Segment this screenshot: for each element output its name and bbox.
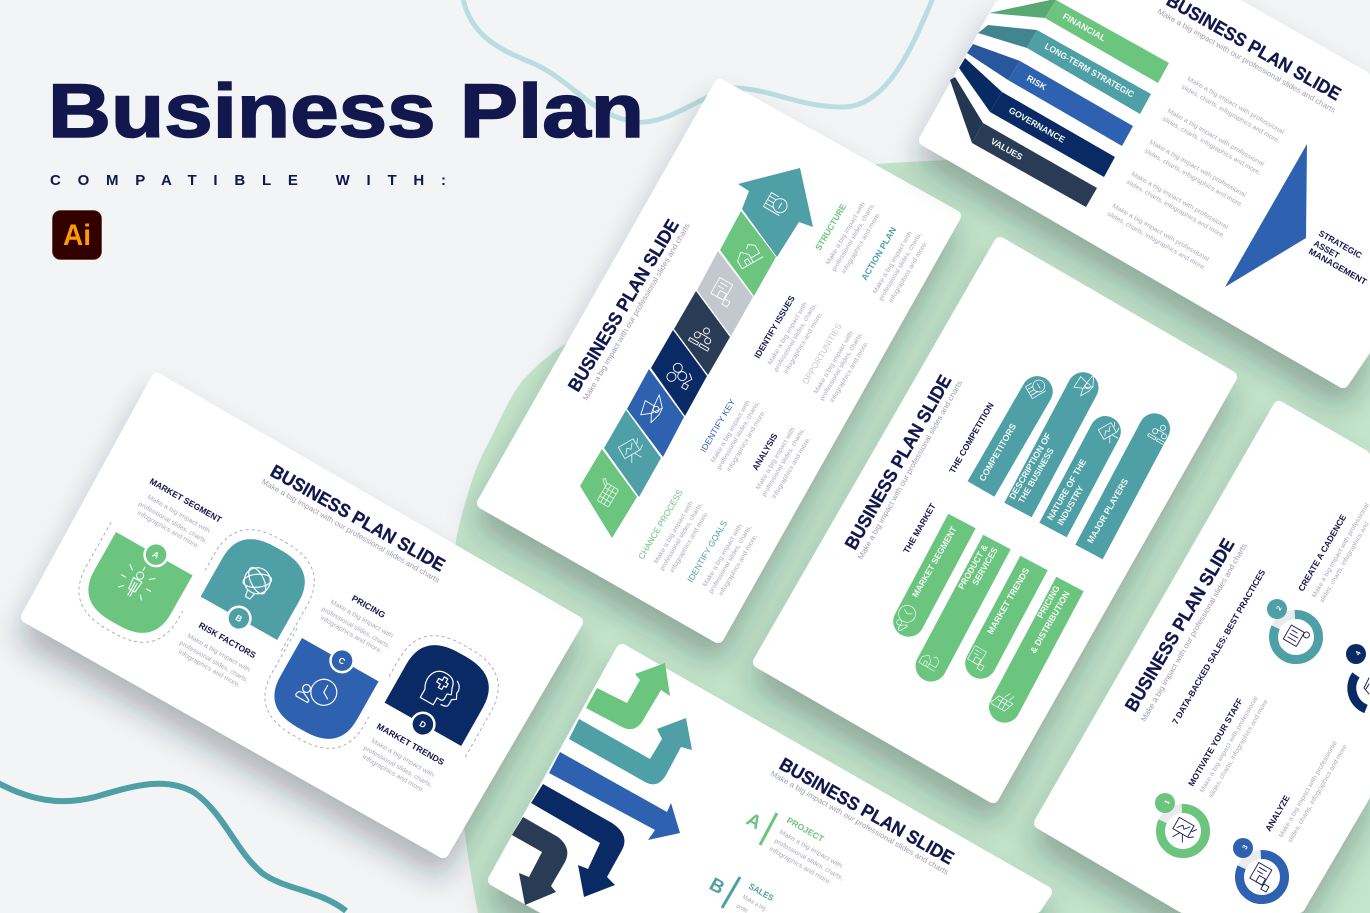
icons in shapes — [114, 559, 465, 713]
text: market segment: infographics and more. — [136, 510, 201, 550]
text: chance process: Make a big impact with — [653, 500, 695, 565]
ring 1: 1 — [1164, 799, 1172, 806]
shape D: D — [418, 718, 428, 730]
text: opportunities: Make a big impact with — [813, 330, 855, 395]
item A project: professional slides, charts, — [773, 838, 845, 882]
ribbon: financial — [989, 0, 1169, 83]
text: identify issues: Make a big impact with — [767, 301, 809, 366]
text: pricing: infographics and more. — [319, 615, 384, 655]
ribbon descriptions: Make a big impact with professional — [1130, 171, 1229, 231]
shape D — [371, 621, 513, 760]
ribbon: risk: RISK — [1025, 73, 1049, 92]
text: identify key: infographics and more. — [726, 409, 767, 473]
heading: BUSINESS PLAN SLIDE — [563, 215, 683, 395]
ribbon descriptions: slides, charts, infographics and more. — [1180, 84, 1281, 145]
subtitle: Make a big impact with our professional slides and charts — [260, 477, 441, 585]
text: identify goals: IDENTIFY GOALS — [685, 518, 729, 584]
text: market trends: MARKET TRENDS — [375, 721, 446, 767]
text: identify goals: Make a big impact with — [702, 523, 744, 588]
text: opportunities: professional slides, charts, — [819, 331, 864, 402]
pill labels: COMPETITORS — [977, 422, 1018, 483]
text: market trends: Make a big impact with — [370, 738, 436, 779]
subtitle: Make a big impact with our professional slides and charts — [1156, 7, 1337, 115]
text: analyze: slides, charts, infographics and more — [1287, 743, 1349, 844]
text: identify issues: professional slides, charts, — [773, 302, 818, 373]
text: create a cadence: Make a big impact with professional — [1311, 502, 1370, 599]
text: chance process: professional slides, charts, — [659, 501, 704, 572]
text: create a cadence — [1296, 502, 1370, 604]
strategic asset management label — [1307, 228, 1369, 287]
text: pricing: Make a big impact with — [329, 599, 395, 640]
strategic asset management label: STRATEGIC — [1317, 228, 1364, 260]
panel: sales practices slide — [1040, 407, 1370, 907]
text: analyze — [1263, 740, 1349, 844]
strategic asset management label: MANAGEMENT — [1307, 246, 1369, 287]
item A project — [743, 809, 845, 886]
item A project: PROJECT — [785, 815, 826, 844]
text: risk factors: RISK FACTORS — [197, 620, 258, 660]
shape A: A — [151, 549, 161, 561]
arrow dark — [512, 817, 567, 905]
arrow icons — [592, 193, 790, 507]
text: structure: Make a big impact with — [825, 201, 867, 266]
text: pricing: professional slides, charts, — [320, 606, 392, 650]
heading: BUSINESS PLAN SLIDE — [776, 753, 958, 868]
blue triangle — [1225, 144, 1307, 287]
text: identify goals: infographics and more. — [718, 533, 759, 597]
pill labels: MARKET SEGMENT — [910, 524, 959, 599]
ring 3: 3 — [1242, 844, 1250, 851]
text: risk factors: professional slides, charts, — [178, 640, 250, 684]
arrow teal — [569, 718, 692, 784]
text: create a cadence: slides, charts, infographics and — [1319, 520, 1370, 604]
panel: four step shapes slide — [27, 379, 577, 852]
panel: strategic ribbons slide — [925, 0, 1369, 382]
ribbon descriptions: Make a big impact with professional — [1148, 139, 1247, 199]
text: chance process: infographics and more. — [669, 510, 710, 574]
text: analysis — [750, 426, 812, 500]
text: risk factors — [177, 620, 258, 689]
ribbon: values — [950, 77, 1097, 207]
subtitle: Make a big impact with our professional slides and charts — [769, 769, 950, 877]
compatible with heading: COMPATIBLE WITH: — [50, 172, 446, 189]
text: identify key: Make a big impact with — [710, 399, 752, 464]
text: market segment: MARKET SEGMENT — [148, 476, 224, 525]
pill labels: DESCRIPTION OF — [1007, 431, 1054, 501]
ribbon: financial: FINANCIAL — [1061, 11, 1108, 44]
arrow navy — [531, 784, 624, 897]
pill labels: PRODUCT & — [956, 542, 990, 591]
heading: BUSINESS PLAN SLIDE — [267, 460, 449, 575]
text: action plan — [859, 225, 929, 304]
text: identify key: professional slides, charts, — [716, 400, 761, 471]
text: market trends: professional slides, charts, — [362, 745, 434, 789]
text: analyze: ANALYZE — [1263, 793, 1292, 833]
pill icons — [890, 373, 1172, 713]
text: identify issues: IDENTIFY ISSUES — [752, 294, 797, 360]
shape B: B — [234, 612, 244, 624]
pill labels: MARKET TRENDS — [985, 566, 1031, 636]
text: structure — [813, 201, 882, 275]
shape B — [187, 515, 329, 654]
ring 2: 2 — [1276, 605, 1284, 612]
subtitle: Make a big impact with our professional slides and charts — [856, 379, 964, 561]
ribbon descriptions: Make a big impact with professional — [1166, 108, 1265, 168]
panel: split arrows slide — [494, 650, 1046, 913]
subtitle: Make a big impact with our professional slides and charts — [581, 221, 692, 402]
ribbon descriptions: slides, charts, infographics and more. — [1125, 179, 1226, 240]
ribbon descriptions: Make a big impact with professional — [1186, 76, 1285, 136]
text: market trends: infographics and more. — [361, 754, 426, 794]
pill labels: THE BUSINESS — [1016, 446, 1056, 505]
icon: adobe illustrator: Ai — [63, 219, 91, 252]
ring 1 — [1155, 793, 1207, 855]
item A project: infographics and more. — [768, 846, 833, 886]
heading: BUSINESS PLAN SLIDE — [840, 371, 955, 553]
text: pricing: PRICING — [350, 593, 387, 620]
item B sales: B — [706, 874, 728, 899]
green blob backdrop — [452, 158, 1370, 913]
ribbon descriptions: slides, charts, infographics and more. — [1106, 211, 1207, 272]
text: identify goals — [685, 518, 759, 597]
arrow blue — [549, 752, 680, 840]
text: opportunities: infographics and more. — [829, 340, 870, 404]
decorative curve: top — [463, 0, 933, 122]
ring 3 — [1233, 838, 1286, 901]
text: motivate your staff: Make a big impact with professional — [1199, 695, 1260, 794]
subheading: 7 DATA-BACKED SALES: BEST PRACTICES — [1170, 567, 1267, 726]
item A project: A — [743, 809, 765, 834]
text: structure: infographics and more. — [841, 211, 882, 275]
pill labels: MAJOR PLAYERS — [1085, 477, 1130, 545]
ring 4: 4 — [1355, 650, 1363, 657]
item A project: Make a big impact with — [778, 829, 844, 870]
text: create a cadence: CREATE A CADENCE — [1296, 512, 1348, 593]
text: motivate your staff — [1186, 695, 1270, 799]
text: analysis: ANALYSIS — [750, 431, 780, 472]
text: risk factors: Make a big impact with — [186, 633, 252, 674]
pill labels: PRICING — [1035, 584, 1062, 620]
icon: adobe illustrator — [52, 210, 102, 260]
ribbon: long-term strategic — [978, 25, 1151, 114]
text: chance process — [636, 488, 710, 574]
text: analyze: Make a big impact with professional — [1278, 740, 1339, 839]
heading: BUSINESS PLAN SLIDE — [1120, 535, 1238, 715]
ribbon descriptions: slides, charts, infographics and more. — [1161, 116, 1262, 177]
shape C — [250, 624, 392, 763]
ribbon: values: VALUES — [989, 136, 1025, 162]
text: chance process: CHANCE PROCESS — [636, 488, 685, 561]
pill labels: INDUSTRY — [1055, 484, 1086, 527]
panel: market and competition slide — [759, 243, 1231, 797]
pill labels: NATURE OF THE — [1045, 457, 1088, 522]
text: identify key — [698, 397, 767, 473]
text: identify issues — [752, 294, 824, 375]
text: opportunities — [800, 321, 870, 404]
text: identify key: IDENTIFY KEY — [698, 397, 737, 454]
pill labels — [910, 422, 1130, 655]
shape C: C — [337, 655, 347, 667]
label: the market: THE MARKET — [901, 501, 938, 555]
text: risk factors: infographics and more. — [177, 649, 242, 689]
decorative curve: bottom left — [0, 783, 346, 911]
text: action plan: Make a big impact with — [872, 230, 914, 295]
ribbon descriptions: slides, charts, infographics and more. — [1143, 148, 1244, 209]
text: structure: STRUCTURE — [813, 202, 848, 252]
text: action plan: infographics and more. — [888, 240, 929, 304]
ring 2 — [1267, 599, 1320, 661]
text: identify issues: infographics and more. — [783, 311, 824, 375]
text: opportunities: OPPORTUNITIES — [800, 321, 844, 386]
text: market segment: Make a big impact with — [146, 494, 212, 535]
panel: arrow slide — [483, 85, 955, 637]
text: motivate your staff: slides, charts, infographics and more — [1208, 698, 1270, 799]
strategic asset management label: ASSET — [1312, 238, 1342, 261]
ribbon descriptions — [1106, 76, 1285, 272]
text: analysis: infographics and more. — [771, 436, 812, 500]
text: pricing — [319, 593, 395, 655]
ribbon descriptions: Make a big impact with professional — [1111, 203, 1210, 263]
text: action plan: professional slides, charts, — [878, 231, 923, 302]
segmented arrow — [580, 168, 813, 538]
ribbon: risk — [967, 44, 1133, 146]
arrow green — [586, 663, 670, 729]
text: analysis: professional slides, charts, — [761, 427, 806, 498]
ribbon: long-term strategic: LONG-TERM STRATEGIC — [1043, 41, 1136, 100]
ribbon: governance — [959, 58, 1115, 177]
text: analysis: Make a big impact with — [755, 426, 797, 491]
text: structure: professional slides, charts, — [831, 202, 876, 273]
text: action plan: ACTION PLAN — [859, 225, 898, 282]
subtitle: Make a big impact with our professional slides and charts — [1139, 542, 1249, 723]
text: market segment: professional slides, charts, — [137, 501, 209, 545]
pill labels: & DISTRIBUTION — [1028, 589, 1072, 655]
green pills — [888, 514, 1084, 728]
text: market trends — [361, 721, 446, 794]
text: motivate your staff: MOTIVATE YOUR STAFF — [1186, 696, 1245, 788]
main title: Business Plan — [48, 69, 644, 154]
teal pills — [968, 367, 1175, 559]
item B sales — [706, 874, 776, 913]
pill labels: SERVICES — [970, 546, 1000, 587]
ring 4 — [1346, 644, 1369, 709]
item B sales: SALES — [747, 881, 776, 903]
text: market segment — [136, 476, 224, 550]
ribbon: governance: GOVERNANCE — [1007, 105, 1067, 145]
text: identify goals: professional slides, charts, — [708, 524, 753, 595]
shape A — [64, 518, 206, 657]
label: the competition: THE COMPETITION — [947, 401, 996, 475]
